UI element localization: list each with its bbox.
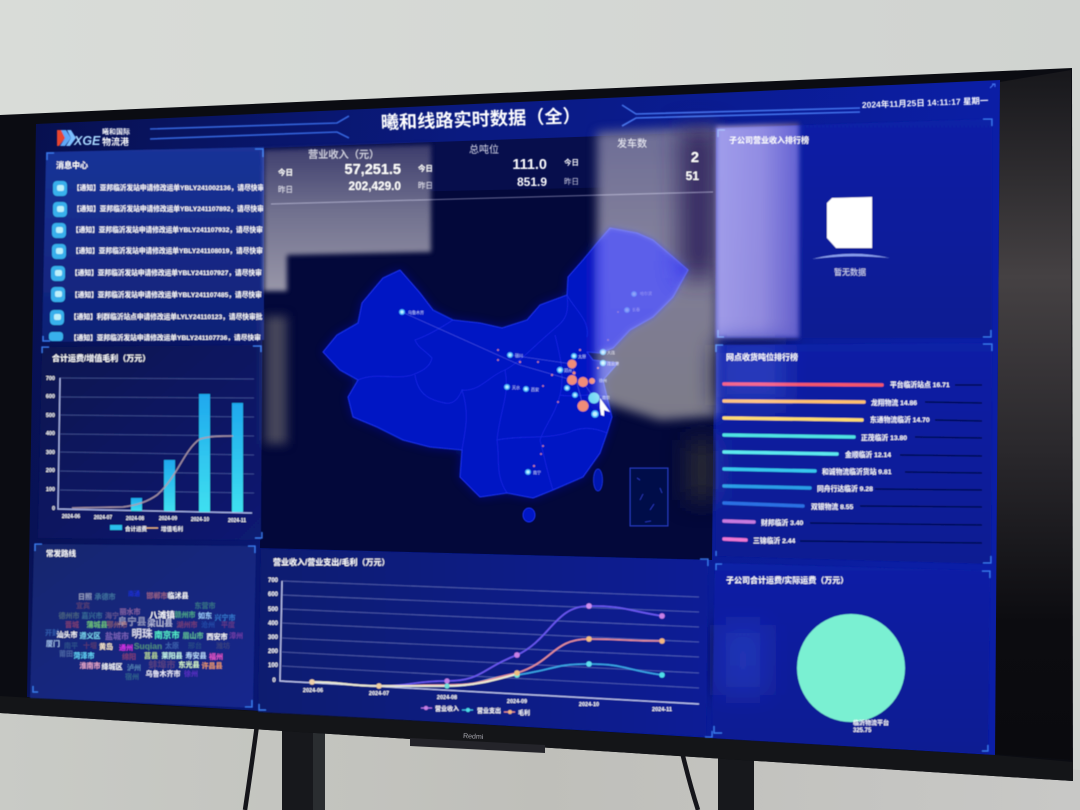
ranking labels: 东通物流临沂 14.70 [870, 415, 930, 424]
words [45, 590, 243, 681]
city labels: 徐州 [599, 377, 607, 383]
words: 赣州市 [174, 610, 196, 619]
words: 莆田 [59, 649, 73, 658]
panel: ranking background [716, 343, 992, 564]
words: 黄岛 [99, 642, 113, 651]
panel: message centre [49, 160, 264, 342]
x labels: 2024-09 [159, 516, 177, 522]
KPI departures [564, 137, 699, 186]
y labels: 300 [46, 450, 55, 456]
y labels: 200 [46, 468, 55, 474]
words: 福州 [209, 652, 223, 661]
words: 南通 [128, 590, 140, 598]
reflections on the screen glass [264, 123, 799, 695]
ranking labels: 和诚物流临沂货站 9.81 [822, 467, 892, 476]
TV brand strip: Redmi [463, 733, 484, 741]
words: Suqian [134, 641, 162, 651]
KPI departures: 发车数 [617, 137, 647, 150]
y labels: 0 [52, 506, 55, 512]
KPI tonnage: 111.0 [512, 157, 547, 173]
words: 明珠 [132, 627, 153, 640]
empty arc [812, 254, 890, 259]
KPI revenue: 57,251.5 [345, 162, 401, 178]
message title: 消息中心 [56, 160, 88, 170]
screen content [30, 84, 995, 754]
reflection: strip left of map [265, 316, 287, 444]
logo: XGE [73, 134, 101, 148]
city labels: 长春 [632, 306, 640, 312]
words: 邢台 [188, 641, 202, 650]
city labels: 大连 [607, 349, 615, 355]
words: 湖州市 [176, 620, 198, 629]
words: 遵义区 [80, 631, 100, 640]
KPI departures: 昨日 [564, 176, 579, 186]
Taiwan [594, 469, 602, 491]
words: 兴宁市 [214, 613, 236, 622]
cursor [600, 398, 610, 416]
KPI tonnage: 昨日 [418, 180, 433, 190]
x labels: 2024-07 [369, 691, 389, 697]
ranking labels: 平台临沂站点 16.71 [890, 380, 950, 389]
points [309, 603, 665, 689]
panel: word cloud background [30, 544, 256, 708]
KPI revenue: 202,429.0 [349, 179, 401, 193]
y labels: 0 [272, 678, 276, 684]
panel: freight chart [46, 353, 254, 533]
words: 寿安县 [186, 651, 206, 660]
words: 泸州 [127, 663, 141, 672]
message items: 【通知】利群临沂站点申请修改运单LYLY24110123，请尽快审批 [70, 312, 263, 321]
city labels [408, 290, 652, 475]
top right title: 子公司营业收入排行榜 [729, 135, 809, 145]
ranking title: 网点收货吨位排行榜 [726, 352, 798, 362]
city labels: 乌鲁木齐 [408, 309, 424, 315]
series expense [312, 664, 662, 686]
x labels: 2024-10 [191, 517, 209, 523]
words: 德州市 [58, 611, 80, 620]
bar tracks [800, 385, 982, 543]
empty label: 暂无数据 [834, 267, 866, 277]
words: 阜宁县 [118, 616, 147, 628]
words: 鄂州市 [106, 620, 128, 629]
y labels: 500 [268, 607, 279, 613]
logo: 曦和国际 [102, 127, 130, 136]
profit line [72, 436, 233, 508]
KPI tonnage: 851.9 [517, 175, 547, 189]
words: 通州 [119, 643, 133, 652]
ranking bars [724, 384, 882, 540]
logo [57, 127, 130, 148]
panel: ranking [724, 352, 982, 545]
words: 淮南市 [80, 661, 100, 670]
words: 南京市 [154, 630, 180, 640]
words: 厦门 [46, 639, 60, 648]
y labels: 600 [268, 592, 279, 598]
KPI revenue: 昨日 [278, 184, 293, 194]
reflection: window right [597, 126, 717, 420]
x labels: 2024-07 [94, 515, 112, 521]
legend: 营业支出 [477, 707, 501, 715]
y labels: 500 [46, 413, 55, 419]
words: 晋城 [65, 620, 79, 629]
words: 汕头市 [56, 630, 78, 639]
ranking labels [753, 380, 950, 545]
KPI revenue [278, 148, 401, 194]
small dots [497, 311, 619, 467]
map: China [323, 228, 688, 526]
city labels: 南宁 [533, 469, 541, 475]
logo: 物流港 [102, 136, 129, 147]
map shape [323, 228, 688, 498]
words: 承德市 [94, 592, 116, 601]
panel: line chart background [258, 549, 708, 736]
KPI tonnage: 今日 [418, 163, 433, 173]
words: 西安市 [206, 632, 228, 641]
words: 眉山市 [182, 631, 204, 640]
words: 开封 [45, 628, 59, 637]
South China Sea inset [630, 468, 668, 526]
words: 八滩镇 [149, 610, 175, 620]
series profit [312, 639, 662, 686]
x labels: 2024-11 [652, 707, 672, 713]
x labels: 2024-06 [62, 514, 80, 520]
legend: 毛利 [518, 709, 530, 717]
words: 宿州 [125, 672, 139, 681]
message items: 【通知】亚邦临沂发站申请修改运单YBLY241002136，请尽快审 [73, 183, 264, 192]
ranking labels: 双银物流 8.55 [811, 502, 854, 511]
words: 十堰 [83, 641, 97, 650]
words: 徐州 [184, 669, 198, 678]
right bezel reflection [995, 70, 1072, 760]
legend [421, 705, 530, 717]
city labels: 哈尔滨 [640, 290, 652, 296]
legend: 增值毛利 [161, 525, 184, 533]
Hainan [523, 508, 535, 522]
KPI divider [271, 192, 713, 204]
y labels: 300 [268, 635, 279, 641]
words: 太原 [165, 641, 179, 650]
axes [280, 581, 699, 704]
panel: pie: 325.75 [853, 728, 872, 734]
pie title: 子公司合计运费/实际运费（万元） [726, 575, 848, 585]
y labels [268, 578, 279, 684]
header decoration right [622, 105, 860, 126]
x labels: 2024-08 [437, 695, 457, 701]
words: 宜宾 [76, 601, 90, 610]
overlap highlight [312, 674, 517, 686]
message items: 【通知】亚邦临沂发站申请修改运单YBLY241107892，请尽快审 [73, 204, 264, 213]
ranking labels: 三锦临沂 2.44 [753, 536, 796, 545]
y labels: 600 [46, 394, 55, 400]
lower bezel lip [0, 696, 1073, 781]
words: 海宁 [105, 611, 119, 620]
words: 丽水市 [120, 607, 140, 616]
city labels: 郑州 [564, 367, 572, 373]
large cyan node [588, 392, 600, 404]
x labels: 2024-11 [228, 518, 246, 524]
lower wall [0, 700, 1080, 810]
words: 绵阳 [122, 652, 136, 661]
words: 如东 [198, 611, 212, 620]
panel: top right background [716, 119, 992, 338]
words: 蒲城县 [86, 620, 108, 629]
city labels: 银川 [515, 352, 523, 358]
city markers [400, 292, 636, 474]
x labels: 2024-10 [579, 702, 599, 708]
words: 许昌县 [202, 661, 222, 670]
words: 邯郸市 [146, 591, 168, 600]
ranking labels: 正茂临沂 13.80 [861, 433, 907, 442]
ranking labels: 金顺临沂 12.14 [845, 450, 891, 459]
bars [131, 394, 243, 512]
message items: 【通知】亚邦临沂发站申请修改运单YBLY241107485，请尽快审 [71, 290, 262, 299]
ranking labels: 财邦临沂 3.40 [761, 518, 804, 527]
city labels: 天水 [512, 384, 520, 390]
words: 临沭县 [168, 591, 188, 600]
KPI departures: 2 [691, 150, 699, 166]
grid [60, 378, 254, 493]
y labels: 400 [268, 621, 279, 627]
y labels: 100 [46, 487, 55, 493]
reflection: lower gray [688, 440, 716, 500]
y labels: 700 [268, 578, 279, 584]
ranking labels: 同舟行达临沂 9.28 [817, 484, 873, 493]
cables [245, 725, 698, 810]
words: 沧州 [201, 620, 215, 629]
y labels: 100 [268, 663, 279, 669]
words: 平度 [221, 620, 235, 629]
panel: word cloud [45, 548, 243, 681]
words: 乌鲁木齐市 [146, 669, 180, 678]
ranking labels: 龙翔物流 14.86 [871, 398, 917, 407]
words: 东营市 [194, 601, 216, 610]
message items: 【通知】亚邦临沂发站申请修改运单YBLY241107932，请尽快审 [72, 225, 263, 234]
icon: empty document [827, 197, 872, 248]
map glow [323, 228, 688, 498]
words: 嘉兴市 [82, 611, 102, 620]
y labels [46, 376, 55, 512]
TV brand strip [410, 733, 545, 753]
KPI departures: 今日 [564, 157, 579, 167]
city labels: 连云港 [607, 360, 619, 366]
panel: line chart [268, 557, 699, 717]
KPI departures: 51 [686, 169, 699, 183]
legend: 营业收入 [435, 705, 459, 713]
panel: pie [726, 575, 905, 734]
words: 莒县 [144, 651, 158, 660]
words: 梁山县 [147, 618, 173, 628]
words: 盐城市 [105, 631, 129, 641]
reflection: bright right column [680, 128, 717, 278]
x labels: 2024-09 [507, 699, 527, 705]
city labels: 南京 [602, 394, 610, 400]
city labels: 西安 [531, 386, 539, 392]
title: 曦和线路实时数据（全） [380, 105, 581, 133]
KPI revenue: 营业收入（元） [308, 148, 379, 161]
panel corner brackets [33, 119, 992, 751]
reflection: ranking panel [716, 345, 786, 405]
panel: message centre background [42, 147, 264, 342]
y labels: 200 [268, 649, 279, 655]
panel: pie background [712, 563, 990, 754]
x labels [62, 514, 246, 524]
KPI band backdrop [264, 132, 716, 196]
y labels: 400 [46, 431, 55, 437]
pie label: 临沂物流平台 [853, 719, 889, 727]
words: 南平 [64, 641, 78, 650]
axes [58, 378, 252, 513]
x labels: 2024-08 [126, 516, 144, 522]
message items: 【通知】亚邦临沂发站申请修改运单YBLY241108019，请尽快审 [72, 246, 263, 255]
screen expand icon [990, 84, 995, 88]
KPI revenue: 今日 [278, 167, 293, 177]
reflection: pie panel [718, 625, 768, 695]
KPI tonnage: 总吨位 [469, 143, 499, 156]
reflection: top right panel [716, 123, 799, 338]
panel: freight chart background [38, 345, 262, 540]
route lines [402, 312, 594, 406]
words: 东光县 [178, 660, 200, 669]
x labels [303, 688, 672, 713]
date time: 2024年11月25日 14:11:17 星期一 [862, 96, 989, 110]
map north-east tint over reflection [597, 228, 688, 350]
screen [27, 80, 1000, 755]
words: 日照 [78, 593, 92, 601]
words: 莱阳县 [162, 651, 182, 660]
orange nodes [567, 360, 595, 412]
words: 菏泽市 [74, 651, 94, 660]
legend [110, 525, 184, 533]
words: 潍坊 [216, 641, 230, 650]
city labels: 太原 [578, 353, 586, 359]
word cloud title: 常发路线 [46, 548, 76, 558]
reflection: window left [264, 145, 431, 291]
freight title: 合计运费/增值毛利（万元） [52, 353, 150, 363]
province borders [358, 295, 607, 493]
words: 蚌埠市 [148, 659, 176, 670]
y labels: 700 [46, 376, 55, 382]
x labels: 2024-06 [303, 688, 323, 694]
pie chart [797, 614, 905, 722]
message items: 【通知】亚邦临沂发站申请修改运单YBLY241107736，请尽快审 [70, 333, 261, 342]
grid [282, 581, 699, 688]
series income [312, 606, 662, 686]
stand legs [282, 725, 754, 810]
KPI tonnage [418, 143, 547, 190]
words: 漳州 [229, 631, 243, 640]
line chart title: 营业收入/营业支出/毛利（万元） [273, 557, 389, 567]
header decoration left [150, 116, 349, 139]
words: 绛城区 [102, 662, 122, 671]
message items [49, 181, 264, 342]
dark map backdrop [260, 185, 716, 560]
message items: 【通知】亚邦临沂发站申请修改运单YBLY241107927，请尽快审 [71, 268, 262, 277]
legend: 合计运费 [125, 525, 148, 533]
panel: top right [729, 135, 890, 277]
